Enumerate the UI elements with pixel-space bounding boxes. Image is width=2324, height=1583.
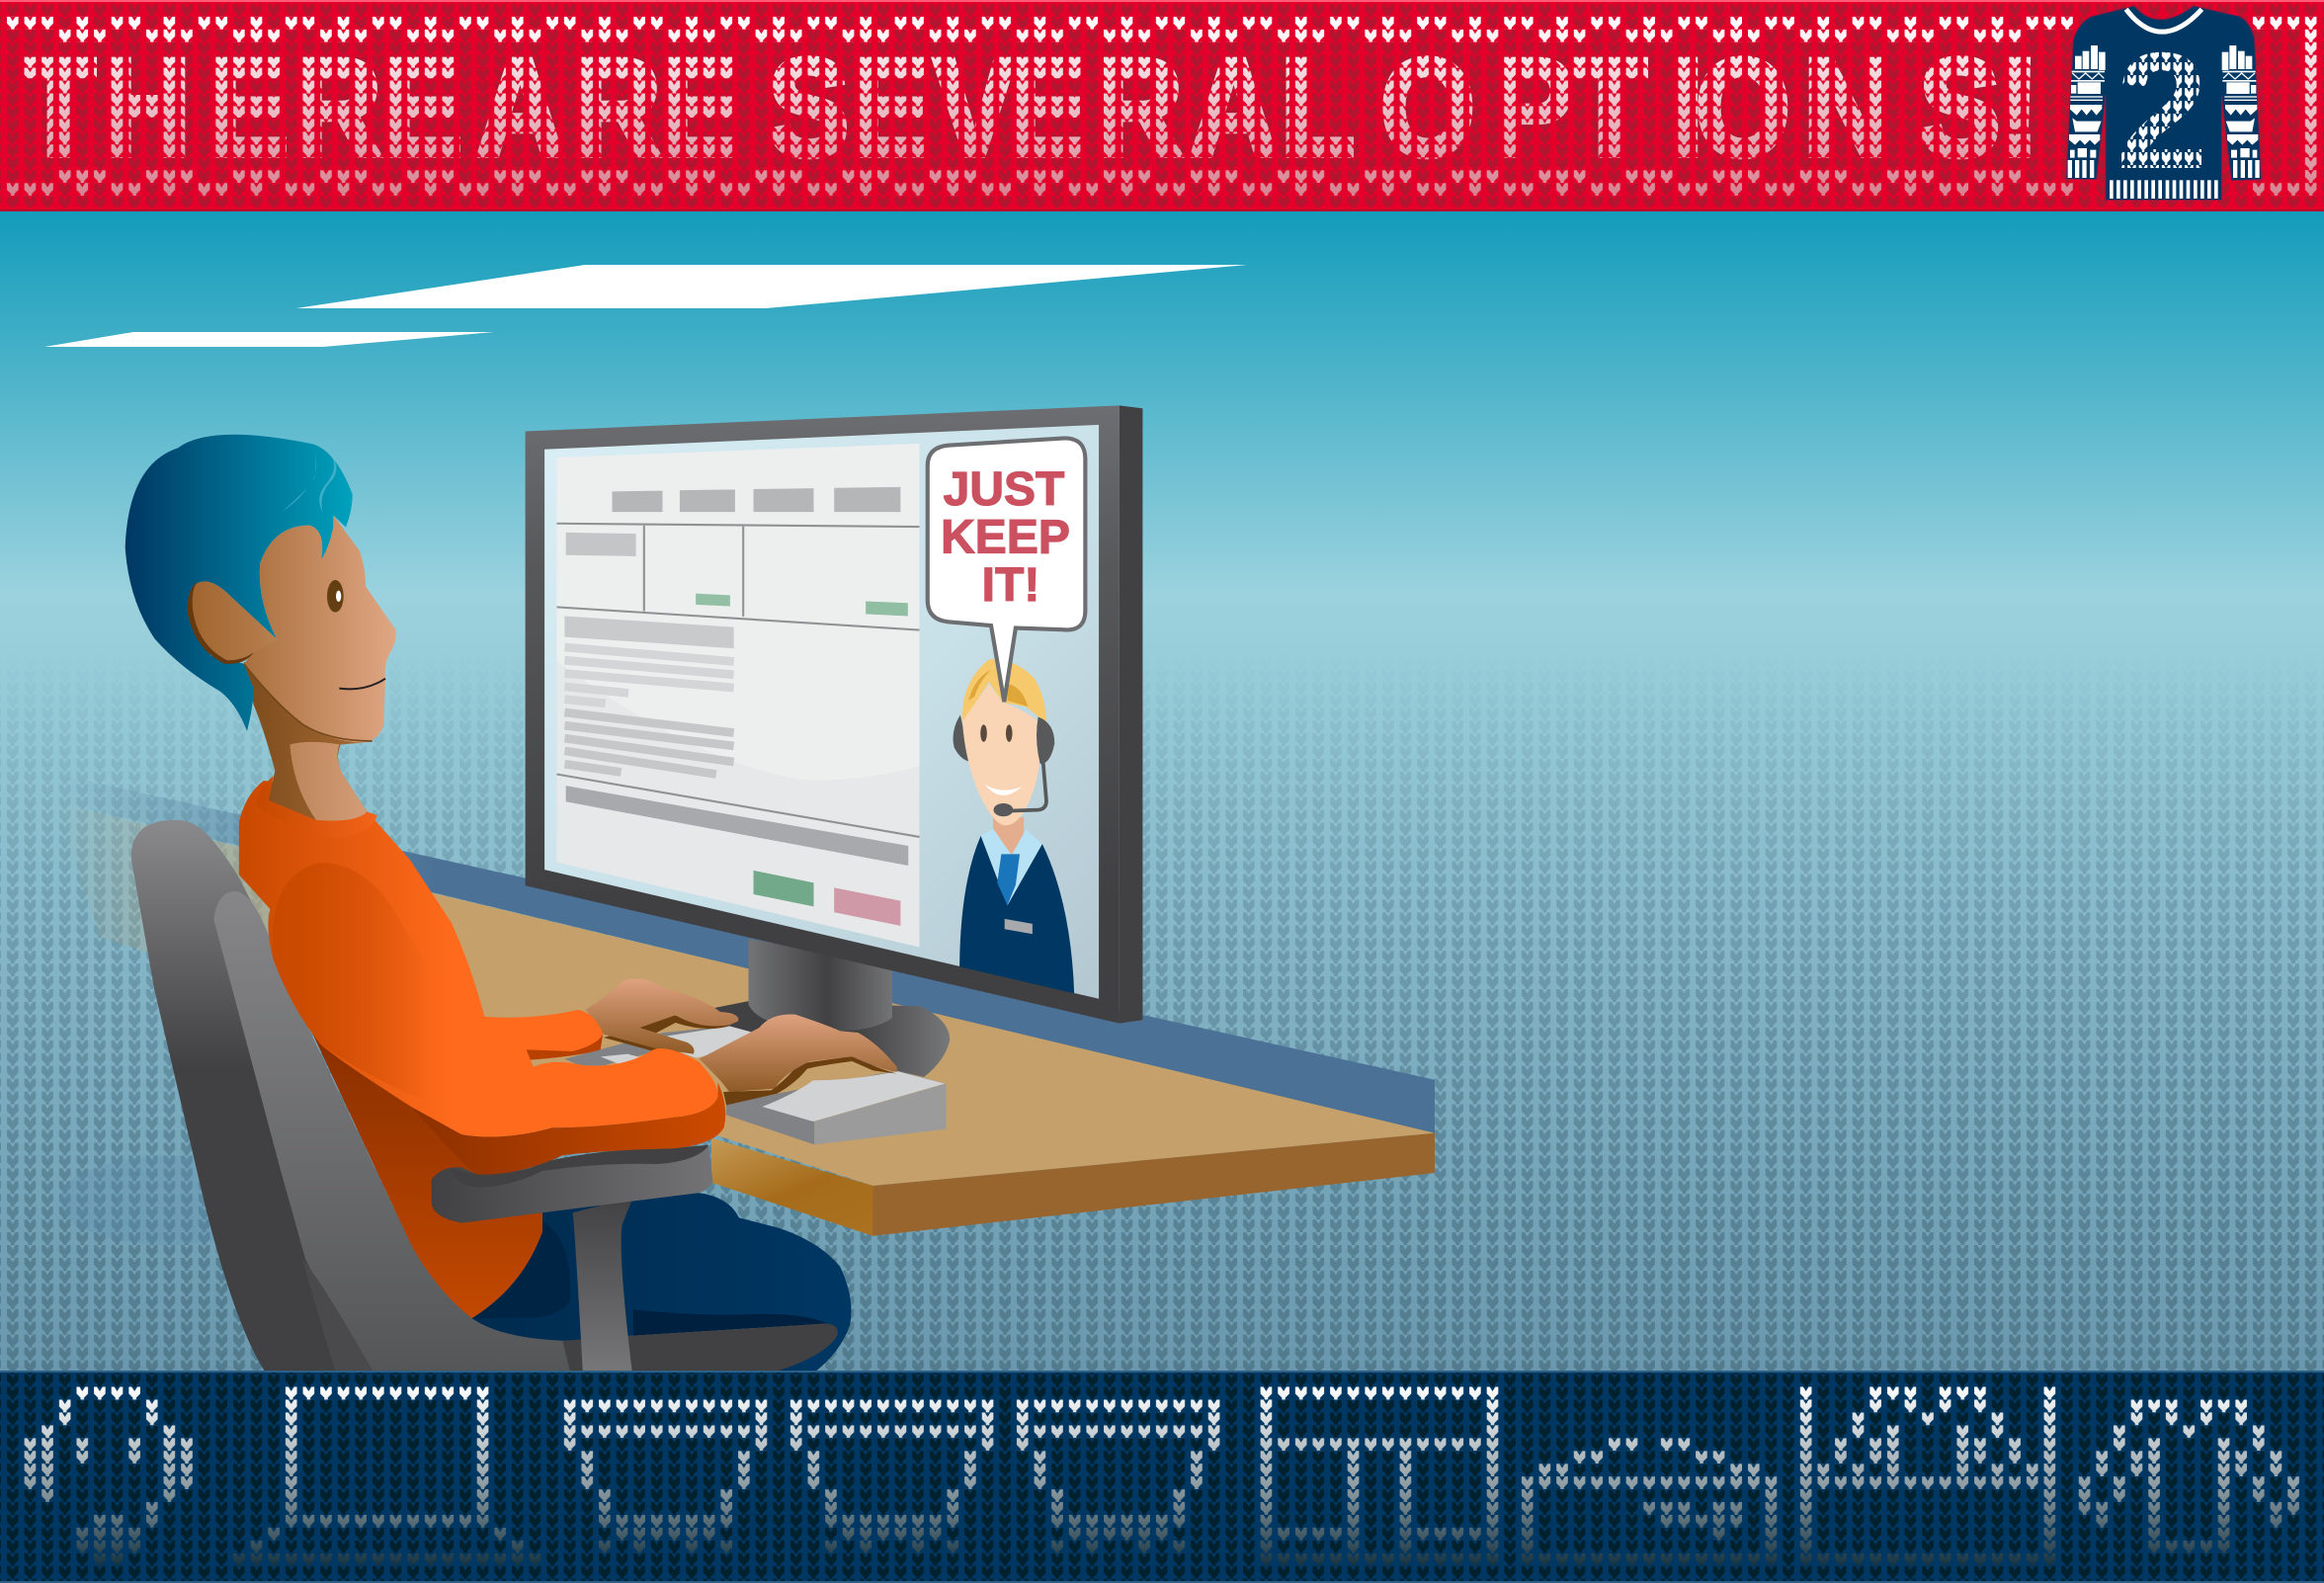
- sweater: [239, 781, 718, 1137]
- neck: [244, 662, 368, 821]
- icon: mountain-shaped figure: [2076, 1399, 2302, 1553]
- footer band: [0, 1371, 2324, 1583]
- hands: [586, 978, 897, 1105]
- person's head: [125, 435, 396, 838]
- icon: person: [22, 1387, 196, 1566]
- speech bubble: [928, 438, 1085, 702]
- speech bubble text: [941, 463, 1070, 612]
- office chair, person body: [131, 781, 851, 1372]
- icon: shopping basket 3: [1014, 1399, 1222, 1553]
- clouds: [44, 265, 1247, 347]
- eye: [327, 580, 344, 613]
- keyboards: [565, 1026, 946, 1144]
- armrest: [432, 1145, 712, 1223]
- monitor: [526, 405, 1142, 1024]
- icon: storefront: [1258, 1387, 1501, 1566]
- back hand: [586, 978, 738, 1054]
- icon: desktop monitor: [230, 1387, 543, 1566]
- sweater icon with number 2: [2066, 6, 2261, 204]
- speech bubble text: IT!: [982, 559, 1039, 612]
- collar: [257, 776, 377, 838]
- monitor stand: [714, 939, 950, 1077]
- seat cushion: [562, 1323, 838, 1372]
- desk: [54, 775, 1435, 1236]
- knit trim rows: [4, 17, 2319, 196]
- sweater icon with number 2: 2: [2116, 18, 2208, 204]
- speech bubble text: JUST: [944, 463, 1064, 516]
- sweater torso underside: [303, 1013, 542, 1318]
- on-screen form: [557, 444, 919, 947]
- face: [244, 516, 396, 743]
- ear: [188, 581, 277, 662]
- near cuff dark: [527, 1034, 603, 1060]
- background: sky gradient with knit texture: [0, 210, 2324, 1372]
- icon: house with pattern: [1797, 1387, 2058, 1566]
- sleeve underside: [411, 1083, 725, 1175]
- knitted transport and device icons: [22, 1387, 2302, 1566]
- mouth: [339, 679, 385, 689]
- front hand: [700, 1014, 897, 1105]
- chair back: [131, 820, 567, 1372]
- support agent: [954, 659, 1074, 993]
- speech bubble text: KEEP: [941, 512, 1070, 564]
- header band: [0, 0, 2324, 211]
- icon: shopping basket 2: [788, 1399, 996, 1553]
- icon: shopping basket 1: [561, 1399, 770, 1553]
- chair back inner panel: [213, 891, 583, 1372]
- title: THERE ARE SEVERAL OPTIONS!: [21, 31, 2039, 185]
- trousers: [472, 1193, 851, 1372]
- chair column: [573, 1197, 633, 1372]
- hair: [125, 435, 353, 731]
- monitor frame: [526, 405, 1142, 1024]
- icon: car: [1519, 1438, 1780, 1566]
